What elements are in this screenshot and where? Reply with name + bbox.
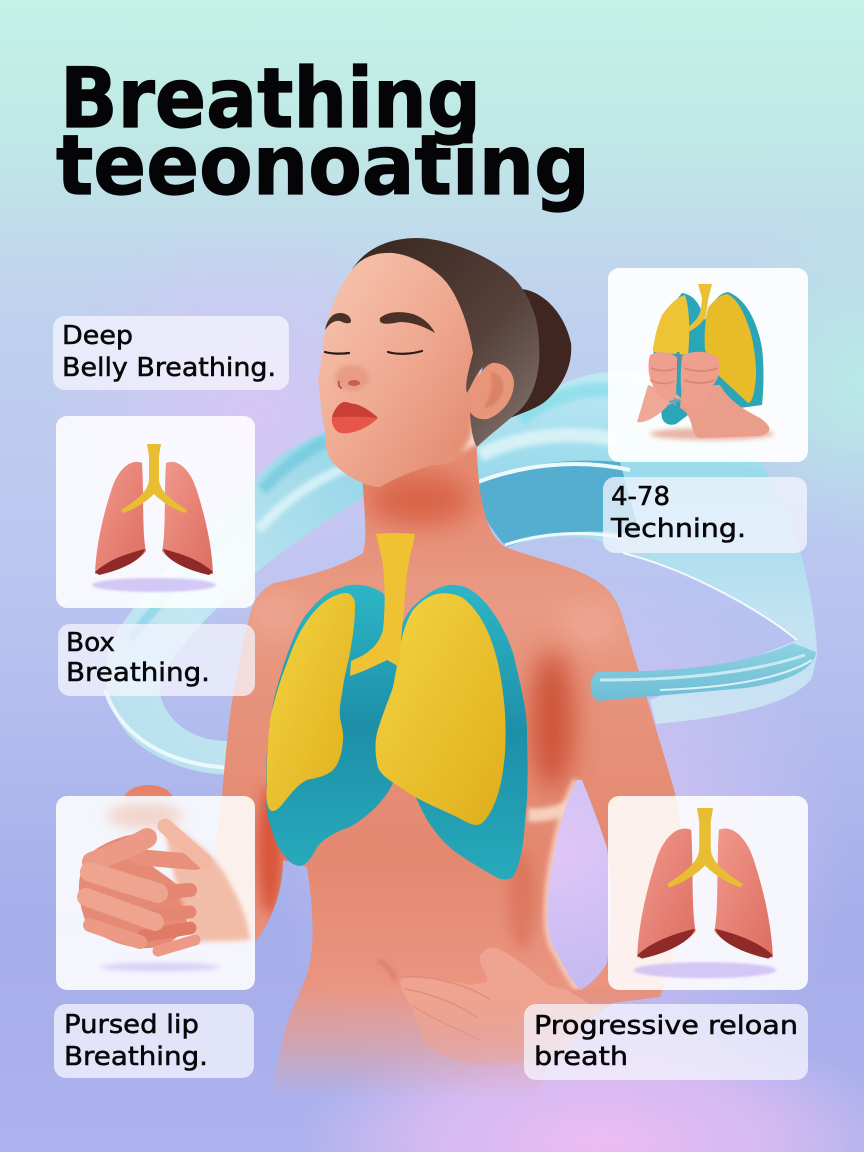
right shoulder highlight: [566, 607, 614, 644]
left hand fingers: [86, 838, 158, 942]
left shoulder highlight: [256, 596, 294, 635]
lips: [332, 402, 378, 433]
teal back lung right: [400, 585, 528, 879]
trachea: [688, 284, 712, 332]
torso shade: [508, 850, 536, 950]
under breast highlight: [526, 800, 568, 824]
hair bun: [500, 289, 571, 418]
label: progressive reloan breath: Progressive reloan: [534, 1011, 798, 1041]
fists: [648, 352, 677, 400]
label: 4-78 techning: [603, 477, 807, 553]
label: box breathing: Breathing.: [66, 658, 210, 688]
ribbon end tube: [590, 643, 816, 701]
torso edge light: [547, 780, 580, 990]
right hand palm: [163, 822, 250, 942]
label: deep belly breathing: Belly Breathing.: [62, 353, 276, 383]
left hand tip above card: [124, 785, 173, 797]
ear: [470, 363, 514, 419]
neck shadow: [368, 474, 472, 526]
ribbon dark band: [472, 461, 640, 547]
card: box breathing lungs: [56, 416, 255, 608]
body torso and arms: [214, 446, 681, 1090]
label: pursed lip breathing: Breathing.: [64, 1042, 208, 1072]
hair: [352, 238, 539, 447]
eye right: [388, 351, 422, 354]
ribbon left band: [106, 432, 372, 775]
main lungs illustration: [266, 533, 528, 879]
label: progressive reloan breath: [524, 1004, 808, 1080]
label: 4-78 techning: 4-78: [611, 482, 670, 512]
ribbon right band: [473, 372, 817, 724]
neck highlight: [435, 415, 478, 466]
card: pursed lip hands: [56, 796, 255, 990]
thumb of right hand: [165, 826, 205, 862]
trachea: [350, 533, 415, 676]
forearm: [570, 988, 659, 1004]
card: progressive lungs: [608, 796, 808, 990]
left hand mass: [79, 834, 190, 948]
label: deep belly breathing: Deep: [62, 321, 133, 351]
forearms: [637, 385, 682, 422]
label: pursed lip breathing: [54, 1004, 254, 1078]
yellow left lobe: [266, 593, 355, 811]
title: Breathing: [60, 50, 481, 147]
yellow right lobe: [376, 593, 506, 825]
woman figure: [124, 238, 700, 1120]
brow right: [380, 312, 435, 333]
belly hand: [400, 948, 600, 1065]
label: box breathing: Box: [66, 628, 115, 658]
eye left: [325, 352, 349, 354]
left arm inner shadow: [258, 785, 282, 915]
label: deep belly breathing: [53, 316, 289, 390]
label: progressive reloan breath: breath: [534, 1042, 628, 1072]
face: [318, 248, 479, 487]
label: 4-78 techning: Techning.: [610, 514, 746, 544]
title: [56, 50, 590, 214]
right rib shadow: [530, 650, 574, 790]
yellow lobes: [653, 295, 689, 355]
label: box breathing: [58, 624, 255, 696]
teal back lung left: [266, 585, 397, 866]
navel crease: [378, 960, 395, 980]
card: 4-7-8 lungs with hands: [608, 268, 808, 462]
right hand fingers: [137, 857, 195, 951]
brow left: [325, 313, 351, 330]
label: pursed lip breathing: Pursed lip: [64, 1010, 199, 1040]
air ribbon swirl: [105, 372, 817, 775]
hand base shadow: [650, 428, 774, 440]
title: teeonoating: [56, 117, 590, 214]
nose: [335, 365, 369, 391]
teal lung backing: [653, 292, 764, 425]
